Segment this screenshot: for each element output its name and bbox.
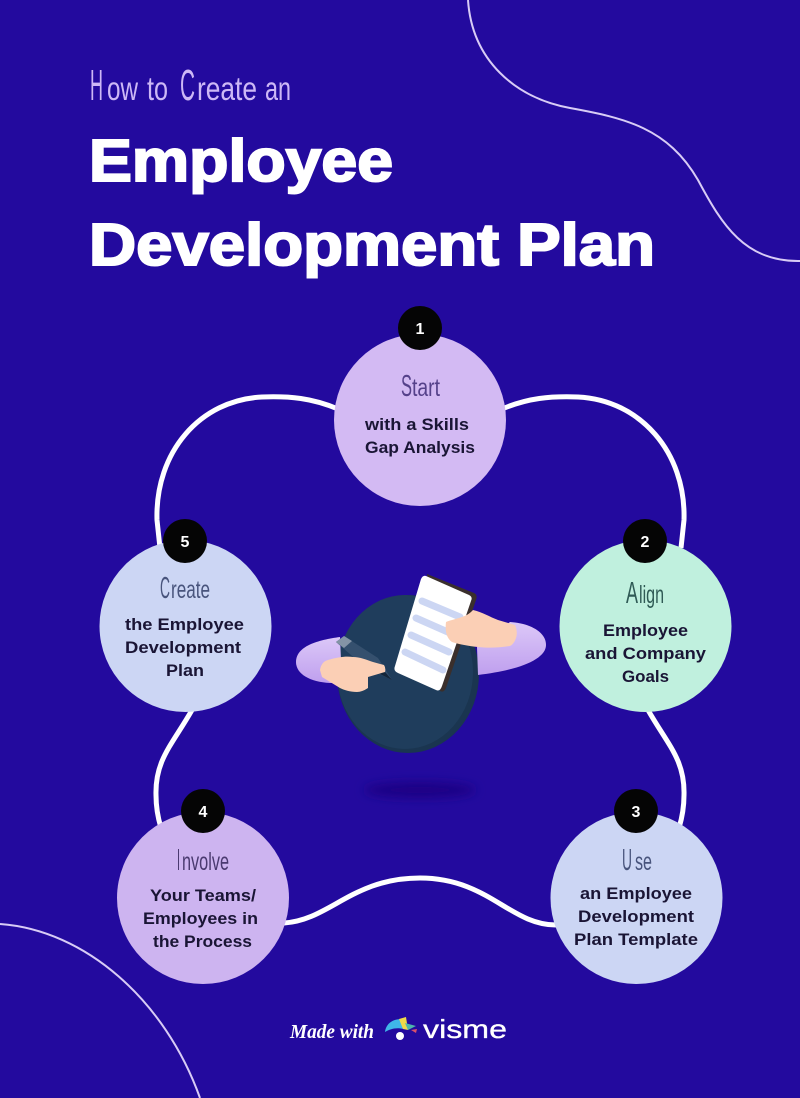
- dark disc: [337, 595, 479, 753]
- step 4: involve: nvolve: [182, 848, 229, 876]
- step 1: start: S: [401, 368, 412, 403]
- step 5: create: the Employee: [125, 616, 244, 634]
- subtitle: C: [180, 61, 195, 110]
- subtitle: reate: [197, 70, 257, 107]
- step 4: involve: I: [177, 842, 180, 877]
- step 2: align: A: [626, 575, 638, 610]
- left sleeve: [296, 637, 342, 683]
- subtitle: an: [265, 70, 291, 107]
- subtitle: to: [147, 70, 168, 107]
- step 5: create: C: [160, 570, 170, 605]
- step 4: involve: Your Teams/: [150, 887, 256, 905]
- step 2: align: 2: [641, 534, 650, 551]
- subtitle: H: [90, 61, 103, 110]
- step 5: create: Plan: [166, 662, 204, 680]
- step 2: align: [560, 519, 732, 712]
- subtitle: ow: [107, 70, 138, 107]
- right sleeve: [477, 622, 546, 675]
- decorative curve: top right: [468, 0, 800, 261]
- step 3: use: an Employee: [580, 885, 692, 903]
- central illustration: hands holding a document: [296, 574, 546, 798]
- icon: visme logo: [385, 1017, 417, 1040]
- step 3: use: Development: [578, 908, 695, 926]
- step 1: start: 1: [416, 321, 425, 338]
- shadow: [364, 782, 476, 798]
- step 3: use: U: [622, 842, 632, 877]
- step 5: create: 5: [181, 534, 190, 551]
- right hand: [446, 610, 517, 648]
- step 1: start: Gap Analysis: [365, 439, 475, 457]
- step 4: involve: 4: [199, 804, 208, 821]
- step 2: align: lign: [639, 581, 664, 609]
- title: Employee: [89, 128, 393, 194]
- title: Development Plan: [89, 212, 655, 278]
- step 3: use: [550, 789, 722, 984]
- step 4: involve: the Process: [153, 933, 252, 951]
- step 1: start: tart: [412, 374, 440, 402]
- step 4: involve: [117, 789, 289, 984]
- step 5: create: [100, 519, 272, 712]
- step 4: involve: Employees in: [143, 910, 258, 928]
- step 3: use: Plan Template: [574, 931, 698, 949]
- document: [394, 574, 477, 692]
- step 3: use: se: [635, 848, 652, 876]
- step 5: create: Development: [125, 639, 242, 657]
- footer: made with visme: Made with: [289, 1021, 374, 1043]
- step 2: align: and Company: [585, 645, 707, 663]
- step 1: start: with a Skills: [364, 416, 469, 434]
- left hand: [320, 657, 385, 692]
- connector ring: [156, 397, 684, 925]
- pen: [336, 636, 392, 680]
- decorative curve: bottom left: [0, 924, 200, 1098]
- step 3: use: 3: [632, 804, 641, 821]
- step 5: create: reate: [171, 576, 210, 604]
- step 2: align: Employee: [603, 622, 688, 640]
- step 1: start: [334, 306, 506, 506]
- footer: made with visme: [289, 1014, 507, 1044]
- footer: made with visme: visme: [423, 1014, 507, 1044]
- step 2: align: Goals: [622, 668, 669, 686]
- title: [89, 128, 655, 278]
